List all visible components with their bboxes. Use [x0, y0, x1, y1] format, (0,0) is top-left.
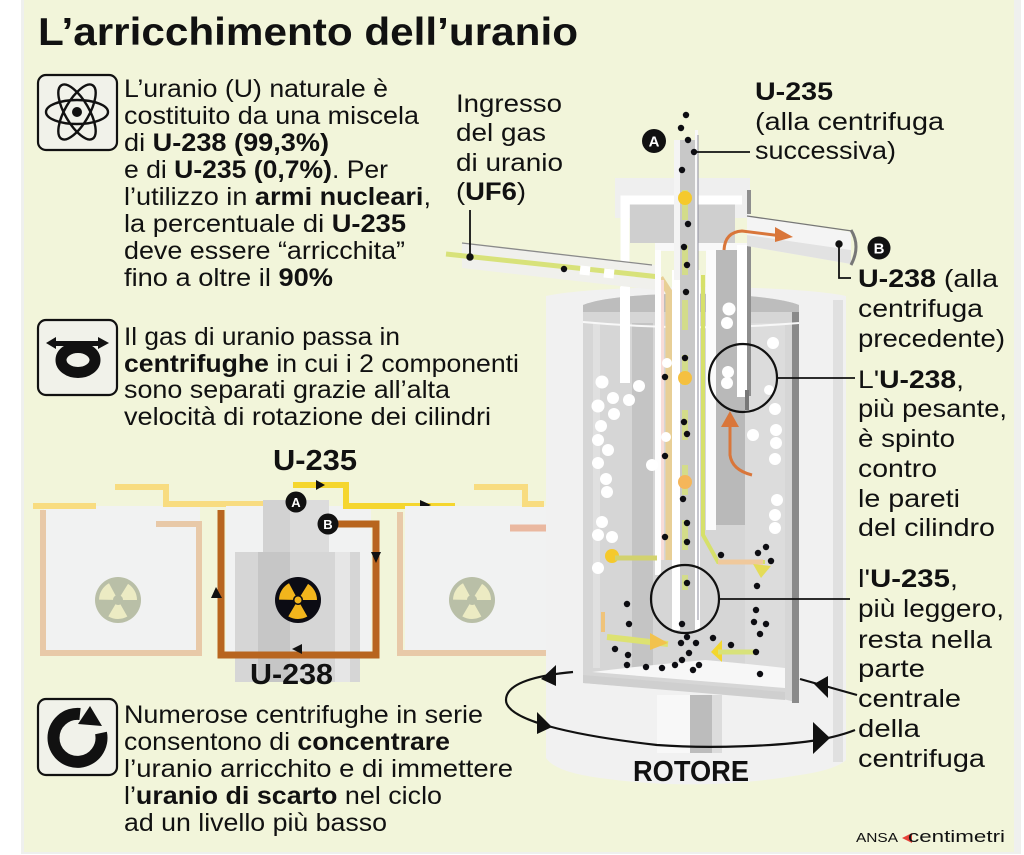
middle centrifuge	[211, 480, 455, 682]
icon: atom	[38, 75, 117, 150]
arrow: rotation	[506, 665, 857, 754]
credit	[856, 827, 1005, 846]
upper housing	[615, 178, 751, 396]
icon: cycle	[38, 699, 117, 775]
inner pipes	[620, 287, 630, 383]
pipe: inlet	[446, 243, 669, 560]
inner cylinder	[583, 294, 799, 703]
arrow: U-238 brown loop	[221, 510, 376, 655]
text block: natural uranium: l’utilizzo in armi nucleari ,	[124, 183, 431, 211]
right centrifuge (faded)	[400, 487, 546, 653]
badge B: B	[323, 517, 333, 532]
label: U-235 output	[755, 78, 944, 165]
credit: ANSA	[856, 830, 898, 845]
text block: natural uranium: fino a oltre il 90%	[124, 264, 333, 292]
label: ROTORE: ROTORE	[633, 756, 749, 788]
text block: centrifuges	[124, 323, 519, 431]
text block: U-238 heavier	[858, 366, 1007, 542]
text block: centrifuges: Il gas di uranio passa in	[124, 323, 400, 351]
text block: series: consentono di concentrare	[124, 728, 450, 756]
yellow flow marks	[603, 191, 771, 662]
radiation symbol	[275, 577, 321, 623]
label: gas inlet: del gas	[456, 119, 546, 147]
text block: series	[124, 701, 513, 837]
label: gas inlet	[456, 90, 563, 206]
label: U-235 output: successiva)	[755, 137, 896, 165]
U-238 white particles	[592, 302, 783, 574]
badge A: A	[291, 495, 301, 510]
label: U-235 output: U-235	[755, 78, 833, 106]
text block: U-235 lighter: parte	[858, 655, 925, 683]
text block: natural uranium: la percentuale di U-235	[124, 210, 406, 238]
text block: U-238 heavier: contro	[858, 455, 937, 483]
label: U-238: U-238	[250, 659, 333, 691]
label: gas inlet: Ingresso	[456, 90, 562, 118]
text block: series: l’uranio di scarto nel ciclo	[124, 782, 442, 810]
icon: centrifuge	[38, 320, 117, 395]
outer casing	[546, 287, 846, 784]
leader lines	[467, 152, 855, 599]
credit: centimetri	[908, 827, 1005, 846]
badge: main A: A	[649, 134, 660, 150]
text block: U-238 heavier: è spinto	[858, 425, 955, 453]
central tube	[672, 130, 700, 630]
text block: natural uranium: costituito da una miscela	[124, 102, 419, 130]
label: U-235: U-235	[273, 445, 357, 477]
text block: U-238 heavier: più pesante,	[858, 395, 1007, 423]
rotor shaft	[657, 695, 722, 753]
text block: U-238 heavier: del cilindro	[858, 514, 995, 542]
arrow: upward flow	[721, 411, 752, 475]
text block: U-235 lighter: più leggero,	[858, 595, 1004, 623]
callout circle: U-238	[709, 344, 777, 412]
label: U-238 output: U-238 (alla	[858, 265, 998, 293]
text block: natural uranium: deve essere “arricchita”	[124, 237, 405, 265]
text block: natural uranium: L’uranio (U) naturale è	[124, 75, 388, 103]
text block: U-235 lighter: resta nella	[858, 626, 992, 654]
badge: main A	[642, 129, 666, 153]
cascade diagram	[33, 445, 546, 691]
text block: centrifuges: centrifughe in cui i 2 componenti	[124, 350, 519, 378]
label: gas inlet: (UF6)	[456, 178, 526, 206]
text block: natural uranium: di U-238 (99,3%)	[124, 129, 329, 157]
cylinder floor	[592, 660, 785, 688]
arrow: U-235 yellow path	[293, 485, 455, 506]
text block: U-235 lighter	[858, 565, 1004, 773]
callout circle: U-235	[651, 565, 719, 633]
text block: U-235 lighter: l'U-235 ,	[858, 565, 958, 593]
title: L’arricchimento dell’uranio	[38, 11, 578, 54]
text block: U-238 heavier: le pareti	[858, 485, 960, 513]
label: gas inlet: di uranio	[456, 149, 563, 177]
label: U-235 output: (alla centrifuga	[755, 108, 944, 136]
label: U-238 output	[858, 265, 1005, 353]
text block: natural uranium: e di U-235 (0,7%) . Per	[124, 156, 388, 184]
text block: series: Numerose centrifughe in serie	[124, 701, 483, 729]
badge: main B: B	[874, 240, 885, 258]
pipe: outlet	[747, 216, 856, 265]
text block: centrifuges: velocità di rotazione dei cilindri	[124, 403, 491, 431]
main centrifuge	[446, 112, 857, 788]
text block: natural uranium	[124, 75, 431, 292]
text block: U-235 lighter: centrifuga	[858, 745, 985, 773]
text block: U-235 lighter: centrale	[858, 685, 961, 713]
text block: U-238 heavier: L'U-238 ,	[858, 366, 964, 394]
U-235 black particles	[561, 112, 774, 677]
badge B	[318, 514, 338, 534]
badge: main B	[868, 236, 890, 260]
text block: series: ad un livello più basso	[124, 809, 387, 837]
arrow: outlet flow	[724, 227, 793, 250]
label: U-238 output: precedente)	[858, 325, 1005, 353]
text block: series: l’uranio arricchito e di immettere	[124, 755, 513, 783]
badge A	[286, 492, 306, 512]
text block: U-235 lighter: della	[858, 715, 920, 743]
left centrifuge (faded)	[33, 487, 280, 653]
text block: centrifuges: sono separati grazie all’alta	[124, 376, 450, 404]
label: U-238 output: centrifuga	[858, 295, 983, 323]
